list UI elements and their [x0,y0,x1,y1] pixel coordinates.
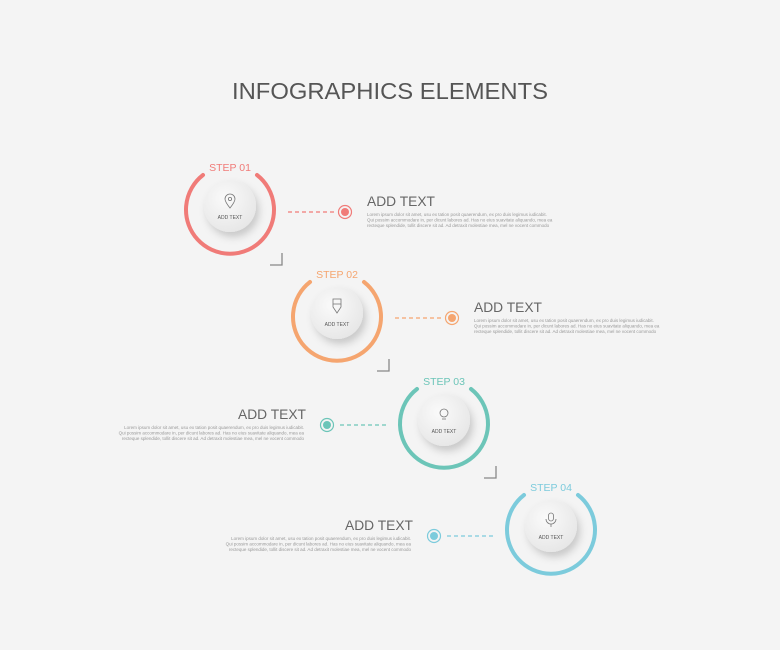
text 03: ADD TEXT [238,406,306,422]
disc 04 [525,500,577,552]
step 04 [226,482,595,574]
text 03: Qui possim accommodare in, per dicunt labores ad. Has no eius suavitate aliquando, mea ea [119,430,304,436]
text 04: recteque splendide, tollit discere sit ad. Ad detraxit molestiae mea, mel ne vocent commodo [229,547,411,552]
text 03 [119,406,306,441]
text 04: Qui possim accommodare in, per dicunt labores ad. Has no eius suavitate aliquando, mea ea [226,542,411,546]
text 01: Lorem ipsum dolor sit amet, usu ex tation posit quaerendum, ex pro duis legimus iudicabit. [367,212,547,217]
disc 01: ADD TEXT [218,215,242,221]
connector 01 [288,211,336,213]
text 01: Qui possim accommodare in, per dicunt labores ad. Has no eius suavitate aliquando, mea ea [367,218,553,222]
text 01: ADD TEXT [367,193,435,209]
text 02: Lorem ipsum dolor sit amet, usu ex tation posit quaerendum, ex pro duis legimus iudicabit. [474,318,654,323]
text 02: Qui possim accommodare in, per dicunt labores ad. Has no eius suavitate aliquando, mea ea [474,324,660,328]
text 04: Lorem ipsum dolor sit amet, usu ex tation posit quaerendum, ex pro duis legimus iudicabit. [231,536,411,541]
disc 02: ADD TEXT [325,322,349,328]
text 04: ADD TEXT [345,517,413,533]
text 02 [474,299,660,334]
text 03: recteque splendide, tollit discere sit ad. Ad detraxit molestiae mea, mel ne vocent commodo [122,436,304,441]
ring 01 [186,175,274,254]
disc 03 [418,394,470,446]
text 01: recteque splendide, tollit discere sit ad. Ad detraxit molestiae mea, mel ne vocent commodo [367,223,550,228]
text 02: ADD TEXT [474,299,542,315]
step 02 [293,269,660,371]
step 03 [119,376,496,478]
label 01: STEP 01 [209,162,251,174]
text 04 [226,517,413,552]
step 02: STEP 02 [316,269,358,281]
disc 03: ADD TEXT [432,429,456,435]
text 02: recteque splendide, tollit discere sit ad. Ad detraxit molestiae mea, mel ne vocent commodo [474,329,657,334]
disc 02 [311,287,363,339]
disc 04: ADD TEXT [539,535,563,541]
disc 01 [204,180,256,232]
text 01 [367,193,553,228]
step 01 [186,162,553,265]
step 04: STEP 04 [530,482,572,494]
title: INFOGRAPHICS ELEMENTS [232,78,548,104]
text 03: Lorem ipsum dolor sit amet, usu ex tation posit quaerendum, ex pro duis legimus iudicabit. [124,425,304,430]
step 03: STEP 03 [423,376,465,388]
